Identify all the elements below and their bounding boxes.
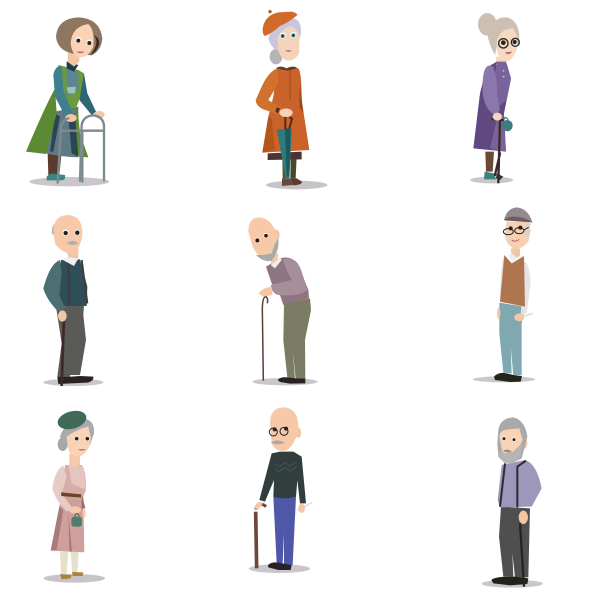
thin walking cane bbox=[262, 297, 268, 381]
walker frame bbox=[58, 115, 104, 183]
character: hunched bearded man with thin cane bbox=[248, 217, 318, 385]
walking cane bbox=[62, 315, 64, 386]
character: man in flat cap and brown vest bbox=[473, 207, 535, 382]
character: woman in purple dress with glasses bbox=[470, 13, 519, 183]
character: woman in orange coat with umbrella bbox=[256, 10, 327, 189]
walking cane bbox=[493, 119, 503, 182]
pen in hand bbox=[515, 313, 533, 319]
green handbag bbox=[71, 513, 82, 527]
bald head with glasses bbox=[269, 407, 301, 451]
head with grey hair and beard bbox=[497, 417, 527, 463]
umbrella bbox=[277, 117, 292, 180]
head with grey bun and glasses bbox=[478, 13, 519, 62]
character: bald man with dark vest and cane bbox=[43, 215, 103, 386]
head and bob hair bbox=[56, 17, 102, 57]
wooden cane bbox=[255, 504, 266, 568]
character: bald man in dark sweater with wooden cane bbox=[249, 407, 312, 573]
character: grey-haired bearded man with suspenders bbox=[482, 417, 543, 588]
handbag bbox=[502, 118, 513, 131]
character: woman in pink dress with green beret bbox=[44, 408, 105, 583]
character: woman with walker, green coat bbox=[26, 17, 109, 186]
pen in hand bbox=[297, 503, 312, 511]
head with cap and glasses bbox=[503, 207, 532, 249]
bald head with grey beard bbox=[248, 217, 280, 264]
bald head with grey moustache bbox=[52, 215, 82, 258]
head with lavender hair and orange beret bbox=[263, 10, 301, 61]
head with grey hair and beret bbox=[56, 408, 94, 457]
walking cane bbox=[520, 523, 524, 587]
